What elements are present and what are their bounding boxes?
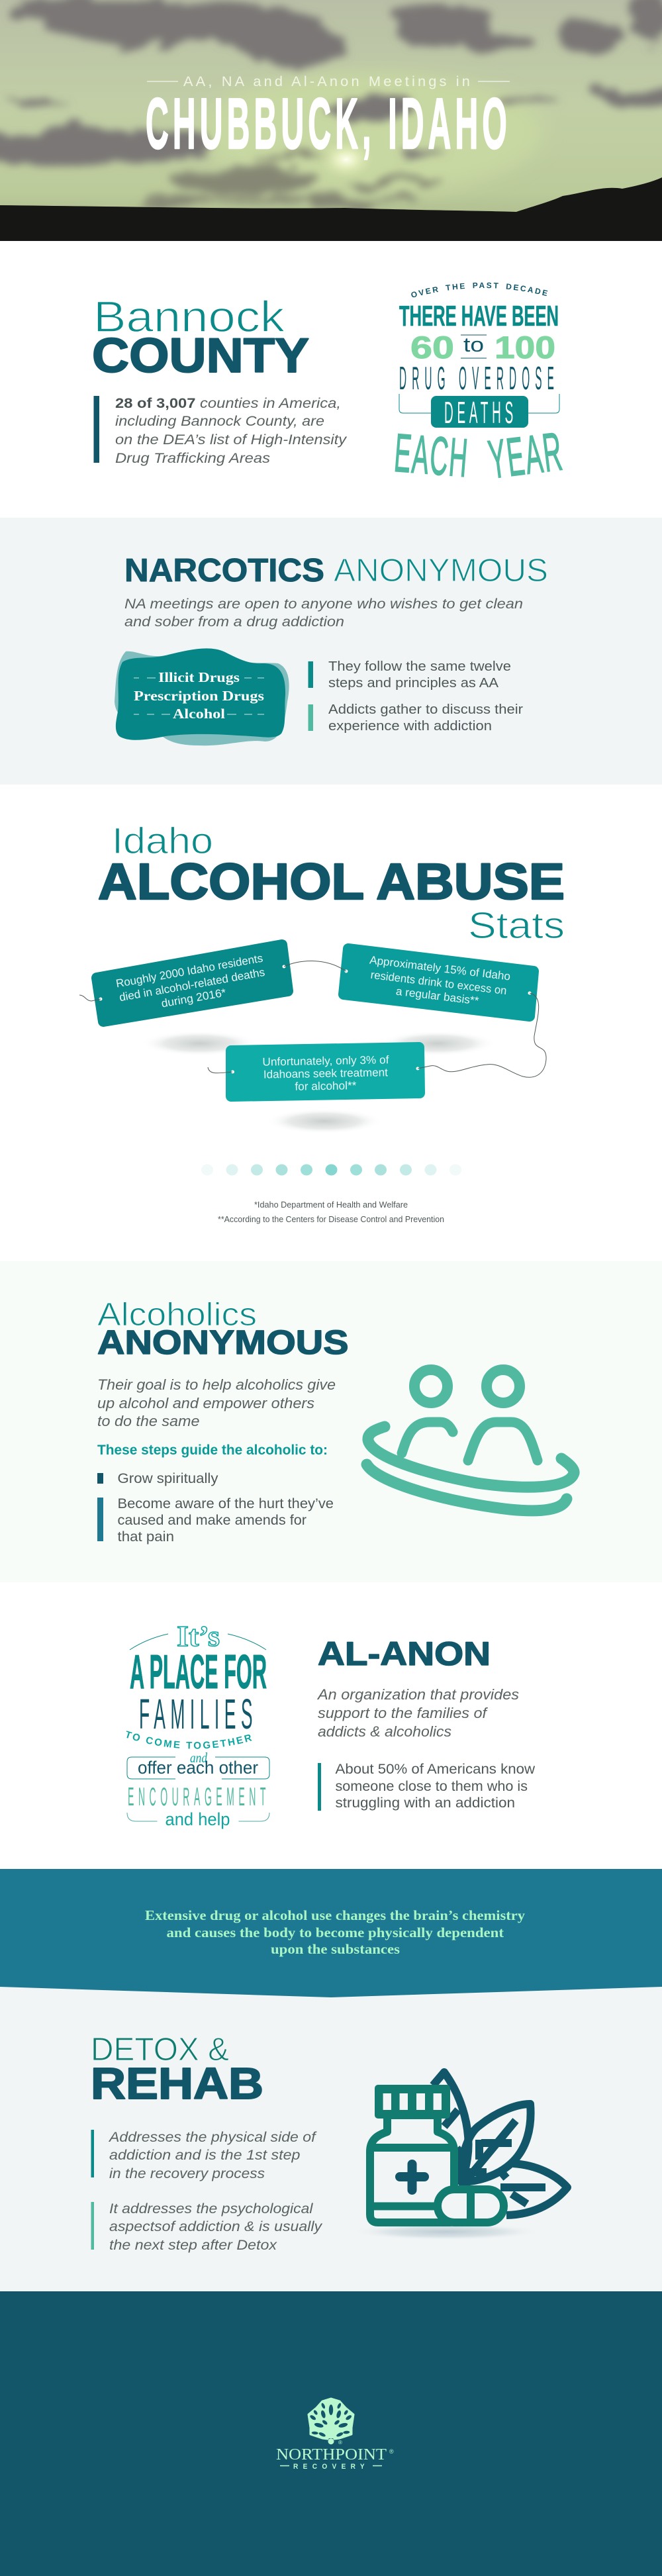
bullet: addicts gather	[308, 702, 523, 734]
bullet: detox	[91, 2130, 317, 2181]
blob: substances list: Illicit Drugs	[158, 669, 240, 685]
banner: brain chemistry: upon the substances	[271, 1941, 400, 1957]
text block: goal: to do the same	[97, 1413, 200, 1429]
typographic callout: overdose deaths each year: 100	[495, 330, 555, 365]
tag shadows	[142, 1031, 496, 1133]
tag: 15 percent drink to excess: residents drink to excess on	[370, 969, 508, 997]
heading: Narcotics Anonymous	[124, 553, 548, 589]
panel: Al-Anon: FAMILIES	[139, 1690, 258, 1738]
panel: Al-Anon: ENCOURAGEMENT	[128, 1783, 270, 1811]
panel: Bannock County: YEAR	[485, 421, 566, 490]
heading: Idaho Alcohol Abuse Stats	[98, 820, 565, 947]
tag: 15 percent drink to excess: a regular basis**	[395, 985, 480, 1007]
bullet: detox: Addresses the physical side of	[108, 2130, 317, 2145]
heading: Bannock County	[92, 292, 309, 383]
heading: Alcoholics Anonymous: ANONYMOUS	[97, 1323, 348, 1361]
banner: brain chemistry: and causes the body to become physically dependent	[167, 1925, 504, 1940]
typographic callout: overdose deaths each year: EACH	[392, 423, 471, 489]
heading: Bannock County: Bannock	[93, 292, 285, 341]
bullet: addicts gather: experience with addiction	[328, 719, 492, 734]
subheading: steps: These steps guide the alcoholic to:	[97, 1443, 328, 1458]
heading: Narcotics Anonymous: NARCOTICS	[124, 553, 324, 589]
panel: Al-Anon	[126, 1620, 536, 1829]
text block: organization description: An organization that provides	[316, 1686, 519, 1703]
icon: people at a table	[367, 1370, 574, 1511]
tag: 2000 residents died: Roughly 2000 Idaho residents	[115, 952, 263, 990]
footnotes: **According to the Centers for Disease Control and Prevention	[218, 1214, 444, 1224]
typographic callout: overdose deaths each year	[392, 282, 566, 490]
bullet: twelve steps	[308, 659, 511, 691]
bottle	[370, 2085, 454, 2222]
panel: Bannock County	[92, 282, 566, 490]
panel: Narcotics Anonymous	[0, 518, 662, 785]
banner: brain chemistry: Extensive drug or alcohol use changes the brain’s chemistry	[145, 1907, 526, 1923]
text block: high intensity trafficking: including Bannock County, are	[115, 414, 324, 429]
heading: Alcoholics Anonymous	[97, 1297, 348, 1361]
text block: high intensity trafficking: 28 of 3,007 counties in America,	[115, 396, 341, 411]
text block: goal	[97, 1376, 336, 1429]
bullet: 50 percent of Americans: someone close to them who is	[335, 1779, 528, 1794]
heading: Detox and Rehab: DETOX &	[91, 2032, 229, 2068]
pill	[438, 2189, 504, 2222]
tag: 2000 residents died: during 2016*	[160, 986, 227, 1010]
bullet: addicts gather: Addicts gather to discuss their	[328, 702, 523, 717]
text block: high intensity trafficking	[94, 396, 348, 466]
dotted row	[201, 1164, 461, 1176]
blob: substances list	[115, 648, 289, 745]
panel: Detox and Rehab background	[0, 1983, 662, 2291]
typographic callout: overdose deaths each year: 60	[410, 330, 454, 365]
text block: NA description	[124, 596, 523, 630]
bullet: grow spiritually: Grow spiritually	[118, 1471, 218, 1486]
heading: Al-Anon: AL-ANON	[318, 1635, 491, 1672]
typographic callout: a place for families: and	[190, 1750, 207, 1766]
text block: high intensity trafficking: Drug Trafficking Areas	[115, 451, 271, 466]
typographic callout: a place for families	[126, 1620, 270, 1829]
logo: Northpoint Recovery: NORTHPOINT	[276, 2446, 387, 2463]
footnotes	[218, 1200, 444, 1224]
footnotes: *Idaho Department of Health and Welfare	[254, 1200, 408, 1210]
tag: 15 percent drink to excess: Approximately 15% of Idaho	[369, 953, 511, 983]
typographic callout: overdose deaths each year: DEATHS	[444, 395, 517, 430]
banner: brain chemistry	[0, 1869, 662, 1997]
text block: organization description: support to the families of	[318, 1705, 489, 1721]
leaves	[433, 2072, 567, 2215]
hero photo: dusk sky	[0, 0, 662, 241]
bullet: rehab: It addresses the psychological	[109, 2201, 314, 2217]
heading: Narcotics Anonymous: ANONYMOUS	[334, 553, 548, 589]
panel: Alcoholics Anonymous	[0, 1261, 662, 1582]
typographic callout: a place for families: It’s	[177, 1620, 220, 1652]
logo: Northpoint Recovery: ®	[389, 2448, 394, 2455]
blob: substances list: Alcohol	[173, 706, 225, 722]
bullet: become aware: that pain	[118, 1529, 174, 1545]
logo: Northpoint Recovery: RECOVERY	[293, 2463, 369, 2471]
text block: NA description: and sober from a drug addiction	[124, 614, 344, 630]
blob: substances list: Prescription Drugs	[134, 688, 264, 704]
bullet: 50 percent of Americans	[318, 1762, 536, 1811]
typographic callout: a place for families: and help	[166, 1809, 230, 1829]
heading: Alcoholics Anonymous: Alcoholics	[97, 1297, 257, 1333]
panel: footer	[0, 2291, 662, 2576]
tag: only 3 percent seek treatment: Idahoans seek treatment	[263, 1066, 388, 1081]
bullet: rehab: the next step after Detox	[109, 2238, 278, 2253]
bullet: 50 percent of Americans: struggling with an addiction	[335, 1795, 515, 1811]
icon: medicine bottle, pill and leaves	[350, 2072, 567, 2240]
text block: NA description: NA meetings are open to anyone who wishes to get clean	[124, 596, 523, 612]
text block: goal: Their goal is to help alcoholics give	[97, 1376, 336, 1393]
heading: Idaho Alcohol Abuse Stats: Stats	[468, 904, 565, 947]
text block: organization description: addicts & alcoholics	[318, 1723, 451, 1740]
text block: organization description	[316, 1686, 519, 1740]
typographic callout: a place for families: TO COME TOGETHER	[126, 1731, 252, 1749]
typographic callout: overdose deaths each year: to	[463, 333, 484, 356]
text block: goal: up alcohol and empower others	[97, 1395, 314, 1411]
heading: Idaho Alcohol Abuse Stats: Idaho	[112, 820, 213, 861]
heading: Detox and Rehab: REHAB	[91, 2059, 263, 2109]
bullet: become aware: Become aware of the hurt they’ve	[118, 1496, 334, 1511]
tag: 2000 residents died	[97, 945, 288, 1022]
bullet: twelve steps: steps and principles as AA	[328, 676, 499, 691]
panel: Al-Anon: A PLACE FOR	[130, 1646, 267, 1699]
text block: high intensity trafficking: on the DEA’s list of High-Intensity	[115, 432, 348, 448]
tag: 15 percent drink to excess	[344, 949, 534, 1016]
heading: Detox and Rehab	[91, 2032, 263, 2109]
panel: Idaho alcohol abuse stats	[0, 785, 662, 1261]
tag: only 3 percent seek treatment	[231, 1047, 420, 1096]
logo: Northpoint Recovery: ®	[338, 2440, 342, 2446]
bullet: twelve steps: They follow the same twelve	[328, 659, 511, 674]
hero banner	[0, 0, 662, 241]
bullet: become aware: caused and make amends for	[118, 1513, 307, 1528]
string linking tags	[79, 961, 546, 1077]
bullet: rehab: aspectsof addiction & is usually	[109, 2219, 323, 2234]
bullet: detox: addiction and is the 1st step	[109, 2148, 301, 2163]
peacock emblem	[308, 2399, 354, 2444]
tag: 2000 residents died: died in alcohol-related deaths	[118, 966, 266, 1004]
hero subtitle: AA, NA and Al-Anon Meetings in	[183, 74, 473, 89]
bullet: rehab	[91, 2201, 323, 2253]
heading: Bannock County: COUNTY	[92, 329, 309, 383]
typographic callout: overdose deaths each year: OVER THE PAST DECADE	[411, 282, 548, 298]
tag: only 3 percent seek treatment: Unfortunately, only 3% of	[262, 1053, 389, 1069]
tag: only 3 percent seek treatment: for alcohol**	[295, 1079, 357, 1093]
heading: Idaho Alcohol Abuse Stats: ALCOHOL ABUSE	[98, 853, 565, 910]
bullet: detox: in the recovery process	[109, 2166, 265, 2181]
typographic callout: a place for families: offer each other	[138, 1758, 258, 1778]
bullet: 50 percent of Americans: About 50% of Americans know	[335, 1762, 536, 1777]
logo: Northpoint Recovery	[276, 2399, 394, 2471]
bullet: become aware	[97, 1496, 334, 1545]
